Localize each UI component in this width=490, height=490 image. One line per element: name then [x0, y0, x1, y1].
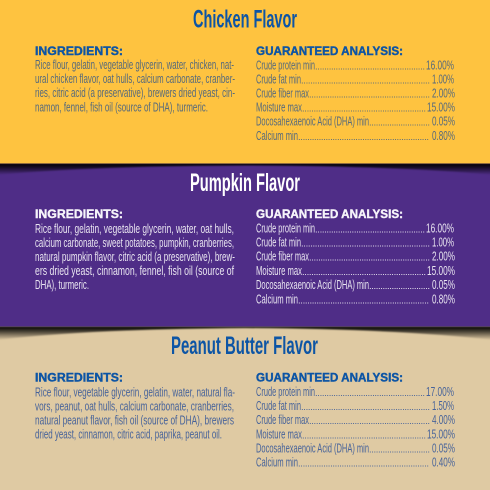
peanut butter guaranteed analysis: 4.00% — [432, 413, 455, 427]
pumpkin guaranteed analysis: Docosahexaenoic Acid (DHA) min — [256, 278, 369, 292]
pumpkin guaranteed analysis: ..................................................... — [309, 253, 430, 264]
pumpkin guaranteed analysis: 1.00% — [432, 236, 454, 250]
pumpkin ingredients: calcium carbonate, sweet potatoes, pumpkin, cranberries, — [35, 236, 234, 250]
peanut butter guaranteed analysis: Docosahexaenoic Acid (DHA) min — [256, 441, 369, 455]
pumpkin guaranteed analysis — [256, 207, 455, 306]
peanut butter guaranteed analysis: Crude fiber max — [256, 413, 309, 427]
peanut butter ingredients: dried yeast, cinnamon, citric acid, paprika, peanut oil. — [35, 428, 222, 442]
chicken guaranteed analysis: Crude fat min — [256, 72, 301, 86]
chicken guaranteed analysis: Calcium min — [256, 129, 298, 143]
chicken guaranteed analysis: ........................... — [369, 118, 430, 129]
peanut butter top shadow — [0, 326, 490, 340]
chicken panel background — [0, 0, 490, 164]
pumpkin guaranteed analysis: ................................................ — [315, 225, 425, 236]
panel: chicken flavor — [0, 0, 490, 164]
chicken guaranteed analysis: ...................................................... — [302, 104, 426, 115]
peanut butter guaranteed analysis: 15.00% — [427, 427, 455, 441]
pumpkin guaranteed analysis: 2.00% — [432, 250, 455, 264]
peanut butter ingredients: Rice flour, vegetable glycerin, gelatin, water, natural fla- — [35, 386, 235, 400]
chicken guaranteed analysis: 0.80% — [432, 129, 455, 143]
chicken guaranteed analysis: Crude fiber max — [256, 86, 309, 100]
peanut butter guaranteed analysis — [256, 371, 455, 470]
chicken guaranteed analysis: Docosahexaenoic Acid (DHA) min — [256, 115, 369, 129]
pumpkin ingredients: INGREDIENTS: — [35, 207, 123, 221]
panel: peanut butter flavor — [0, 326, 490, 490]
chicken title: Chicken Flavor — [193, 6, 297, 34]
pumpkin guaranteed analysis: GUARANTEED ANALYSIS: — [256, 207, 403, 221]
peanut butter guaranteed analysis: Crude fat min — [256, 399, 301, 413]
pumpkin guaranteed analysis: ........................... — [369, 281, 430, 292]
pumpkin guaranteed analysis: Crude fat min — [256, 236, 301, 250]
peanut butter ingredients: vors, peanut, oat hulls, calcium carbonate, cranberries, — [35, 400, 234, 414]
pumpkin guaranteed analysis: Moisture max — [256, 264, 302, 278]
chicken ingredients: INGREDIENTS: — [35, 44, 123, 58]
chicken guaranteed analysis: Moisture max — [256, 101, 302, 115]
pumpkin guaranteed analysis: Calcium min — [256, 292, 298, 306]
peanut butter guaranteed analysis: ................................................ — [315, 388, 425, 399]
pumpkin guaranteed analysis: 15.00% — [427, 264, 455, 278]
pumpkin guaranteed analysis: 0.80% — [432, 292, 455, 306]
chicken ingredients: namon, fennel, fish oil (source of DHA), turmeric. — [35, 100, 208, 114]
pumpkin guaranteed analysis: Crude fiber max — [256, 250, 309, 264]
chicken ingredients: ural chicken flavor, oat hulls, calcium carbonate, cranber- — [35, 72, 235, 86]
chicken guaranteed analysis: GUARANTEED ANALYSIS: — [256, 44, 403, 58]
peanut butter guaranteed analysis: 17.00% — [426, 385, 454, 399]
pumpkin guaranteed analysis: Crude protein min — [256, 222, 315, 236]
peanut butter guaranteed analysis: ......................................................... — [298, 459, 429, 470]
pumpkin guaranteed analysis: 0.05% — [432, 278, 455, 292]
pumpkin ingredients — [35, 207, 235, 292]
chicken guaranteed analysis — [256, 44, 455, 143]
chicken guaranteed analysis: ......................................................... — [298, 132, 429, 143]
peanut butter guaranteed analysis: Crude protein min — [256, 385, 315, 399]
peanut butter panel background — [0, 326, 490, 490]
peanut butter ingredients — [35, 371, 235, 442]
pumpkin ingredients: Rice flour, gelatin, vegetable glycerin, water, oat hulls, — [35, 222, 234, 236]
pumpkin top shadow — [0, 164, 490, 175]
peanut butter guaranteed analysis: 0.05% — [432, 441, 455, 455]
chicken guaranteed analysis: 2.00% — [432, 86, 455, 100]
pumpkin panel background — [0, 164, 490, 326]
pumpkin ingredients: DHA), turmeric. — [35, 278, 89, 292]
pumpkin guaranteed analysis: 16.00% — [426, 222, 454, 236]
chicken ingredients: Rice flour, gelatin, vegetable glycerin, water, chicken, nat- — [35, 58, 234, 72]
chicken guaranteed analysis: ........................................................ — [301, 75, 430, 86]
peanut butter guaranteed analysis: ........................... — [369, 444, 430, 455]
chicken ingredients: ries, citric acid (a preservative), brewers dried yeast, cin- — [35, 86, 235, 100]
pumpkin ingredients: ers dried yeast, cinnamon, fennel, fish oil (source of — [35, 264, 234, 278]
chicken ingredients — [35, 44, 235, 114]
pumpkin guaranteed analysis: ........................................................ — [301, 239, 430, 250]
peanut butter guaranteed analysis: 0.40% — [432, 456, 455, 470]
chicken guaranteed analysis: ..................................................... — [309, 89, 430, 100]
panel: pumpkin flavor — [0, 164, 490, 326]
chicken guaranteed analysis: Crude protein min — [256, 58, 315, 72]
peanut butter ingredients: natural peanut flavor, fish oil (source of DHA), brewers — [35, 414, 234, 428]
peanut butter guaranteed analysis: 1.50% — [432, 399, 454, 413]
pumpkin ingredients: natural pumpkin flavor, citric acid (a preservative), brew- — [35, 250, 235, 264]
peanut butter guaranteed analysis: Moisture max — [256, 427, 302, 441]
peanut butter guaranteed analysis: ..................................................... — [309, 416, 430, 427]
pumpkin title: Pumpkin Flavor — [190, 169, 300, 197]
peanut butter guaranteed analysis: GUARANTEED ANALYSIS: — [256, 371, 403, 385]
peanut butter title: Peanut Butter Flavor — [171, 332, 318, 360]
peanut butter guaranteed analysis: ...................................................... — [302, 430, 426, 441]
pumpkin guaranteed analysis: ...................................................... — [302, 267, 426, 278]
chicken guaranteed analysis: 15.00% — [427, 101, 455, 115]
peanut butter ingredients: INGREDIENTS: — [35, 371, 123, 385]
peanut butter guaranteed analysis: Calcium min — [256, 456, 298, 470]
chicken guaranteed analysis: ................................................ — [315, 61, 425, 72]
peanut butter guaranteed analysis: ........................................................ — [301, 402, 430, 413]
chicken guaranteed analysis: 16.00% — [426, 58, 454, 72]
chicken guaranteed analysis: 0.05% — [432, 115, 455, 129]
pumpkin guaranteed analysis: ......................................................... — [298, 295, 429, 306]
chicken guaranteed analysis: 1.00% — [432, 72, 454, 86]
